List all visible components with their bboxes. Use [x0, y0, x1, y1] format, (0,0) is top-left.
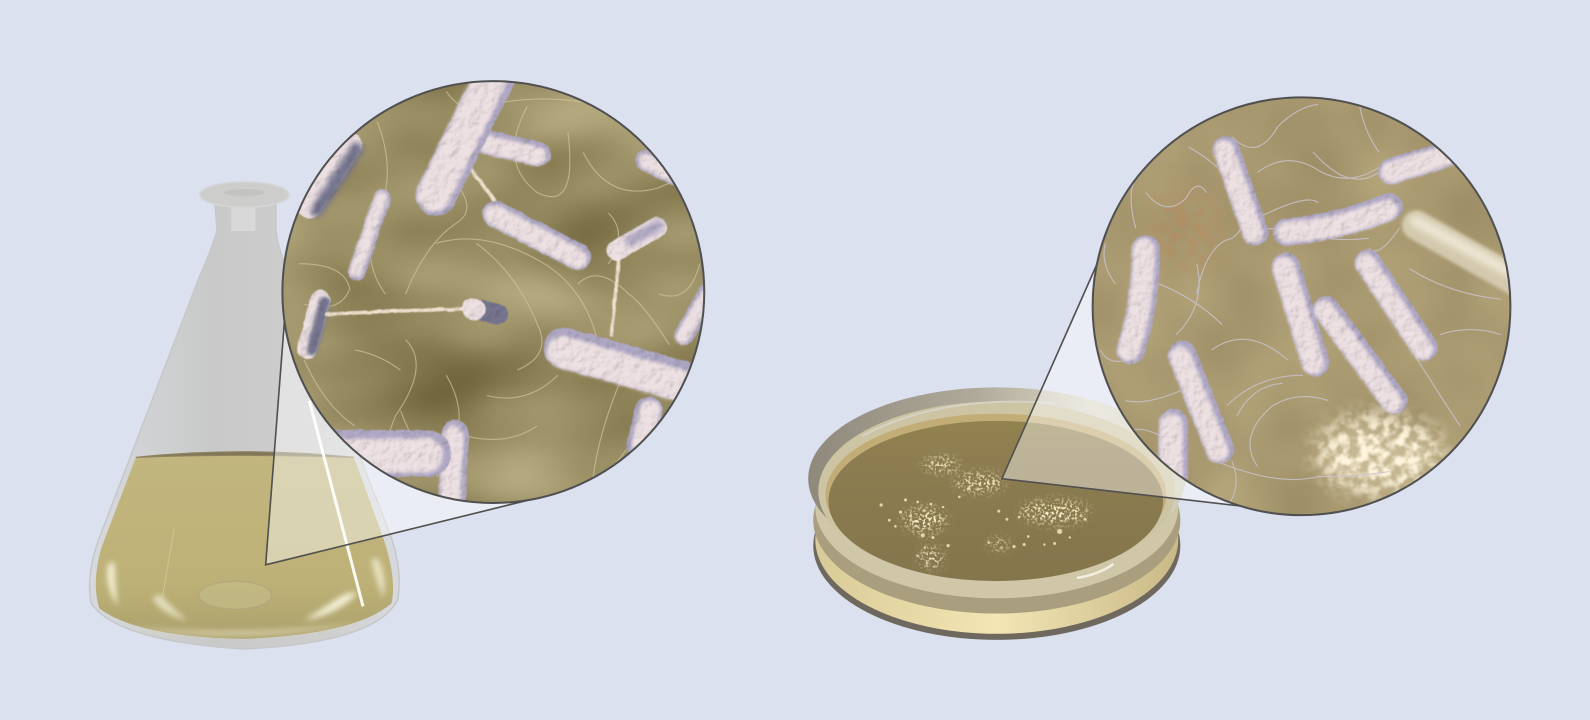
bacterium: centre pair right: [1324, 309, 1394, 403]
agar rim glow: [825, 414, 1166, 576]
circle outline: [1093, 97, 1510, 515]
flask rim: [200, 182, 289, 207]
lid highlight: [862, 402, 1055, 436]
pilus: upper: [469, 167, 495, 201]
scattered colony dots: [880, 487, 1087, 557]
bacterium: upper centre: [1224, 149, 1255, 233]
light glare: [1316, 414, 1442, 495]
agar surface: [828, 421, 1163, 581]
dish cream agar band: [815, 445, 1178, 634]
dish outer rim: [813, 451, 1180, 640]
dish inner wall: [818, 402, 1175, 580]
flask rim opening: [224, 189, 265, 196]
bacteria group: agar surface: [1129, 149, 1460, 487]
bacterium: bottom vertical: [449, 434, 455, 517]
white glass streak: [309, 401, 363, 606]
glass reflection streak: [162, 527, 174, 598]
liquid surface line: [136, 452, 354, 457]
icon: Erlenmeyer flask: [90, 182, 399, 649]
circle background: [1093, 97, 1510, 515]
liquid highlights: [107, 558, 384, 636]
panel: flask with magnified liquid culture: [90, 71, 715, 649]
glare glow: [1318, 422, 1436, 491]
bacterium: blurred upper right: [1416, 221, 1521, 284]
bacterium: small top right: [646, 160, 674, 175]
pilus: horizontal: [327, 309, 462, 314]
base reflection: [199, 581, 272, 609]
callout wedge: [1002, 264, 1249, 507]
bacterium: stub behind large rod: [487, 142, 538, 156]
agar surface texture: [1212, 144, 1492, 514]
bacterium: bottom left short: [1171, 424, 1173, 487]
bacterium: right rod: [1366, 263, 1425, 350]
dish lid: [808, 387, 1185, 570]
circle background: [282, 81, 704, 503]
bacterium: far right cut: [682, 294, 708, 337]
dish lower highlight: [1077, 564, 1113, 578]
flagella: [1100, 101, 1501, 507]
speckled clusters: [904, 457, 1089, 568]
bacterium: upper left dark: [309, 145, 357, 210]
bacterium: slim rod: [356, 198, 382, 272]
bacterium: bottom left large: [324, 453, 428, 456]
flask neck highlight: [231, 201, 256, 231]
bacterium: center rod: [495, 214, 578, 259]
bacterial colonies: [880, 457, 1089, 568]
circle outline: [282, 81, 704, 503]
wavy liquid texture: [282, 81, 706, 505]
magnified circle: agar colony surface: [1091, 96, 1521, 516]
icon: Petri dish: [808, 387, 1185, 640]
bacterium: right grey rod: [617, 225, 659, 250]
liquid culture: [96, 452, 393, 639]
callout wedge: [266, 314, 546, 565]
bacterium: horizontal centre: [1287, 207, 1389, 232]
flagella: [299, 91, 700, 487]
bacterium: large upper rod: [434, 71, 497, 196]
bacterium: large lower right rod: [563, 348, 715, 395]
flask glass body: [90, 203, 399, 649]
bacterium: lower left long: [1180, 355, 1220, 451]
bacterium: top right: [1391, 150, 1460, 172]
bacterium: left dark: [307, 300, 324, 350]
dish light band: [815, 416, 1178, 598]
panel: Petri dish with magnified colonies: [808, 96, 1521, 640]
magnified circle: liquid culture: [282, 71, 715, 517]
bacterium: left long: [1129, 249, 1146, 350]
dish tan band: [813, 427, 1180, 614]
bacterium: lower right small: [641, 411, 650, 446]
bacteria group: liquid culture: [307, 71, 715, 517]
pilus: right: [611, 262, 619, 335]
bacterium: centre pair left: [1284, 267, 1315, 363]
orange patch: [1163, 198, 1212, 256]
bacterium: center dark small: [473, 308, 498, 314]
